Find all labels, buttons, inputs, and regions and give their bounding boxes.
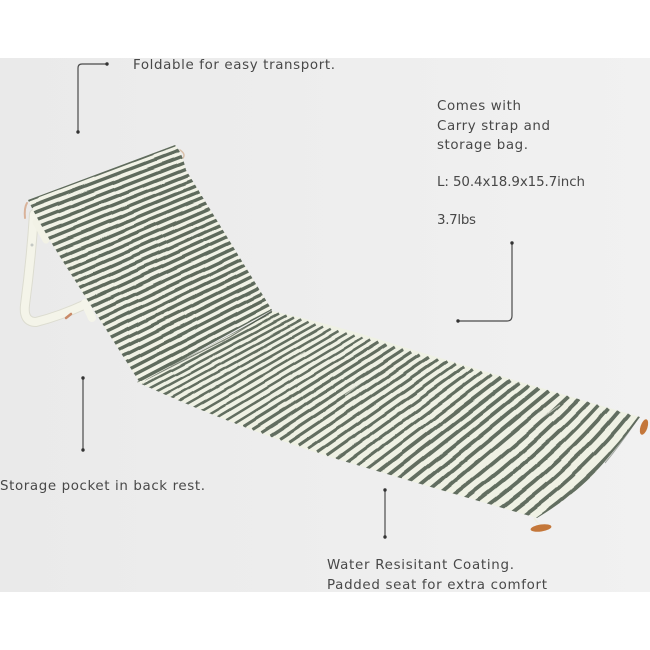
- tufting creases on seat: [270, 352, 560, 430]
- callout line: water resistant: [383, 488, 387, 539]
- callout text: specifications: L: 50.4x18.9x15.7inch: [437, 175, 585, 190]
- callout text: water resistant and padded seat: [327, 558, 547, 593]
- callout text: specifications: [437, 99, 585, 228]
- seat cushion: [137, 312, 640, 518]
- callout text: specifications: Carry strap and: [437, 119, 550, 134]
- callout text: foldable: Foldable for easy transport.: [133, 58, 335, 73]
- callout text: specifications: storage bag.: [437, 138, 528, 153]
- callout line: storage pocket: [81, 376, 85, 452]
- right edge shadow: [605, 420, 637, 463]
- toggle: right corner: [638, 418, 650, 436]
- callout text: specifications: 3.7lbs: [437, 213, 476, 228]
- seam shadow: [145, 311, 272, 380]
- callout text: water resistant and padded seat: Padded seat for extra comfort: [327, 578, 547, 593]
- toggle: bottom corner: [530, 518, 552, 533]
- chair frame: [25, 150, 184, 322]
- backrest cushion: [28, 145, 272, 382]
- callout line: foldable: [76, 62, 109, 134]
- callout text: water resistant and padded seat: Water Resisitant Coating.: [327, 558, 514, 573]
- callout text: specifications: Comes with: [437, 99, 521, 114]
- callout line: specifications: [456, 241, 514, 323]
- callout text: storage pocket: Storage pocket in back rest.: [0, 479, 205, 494]
